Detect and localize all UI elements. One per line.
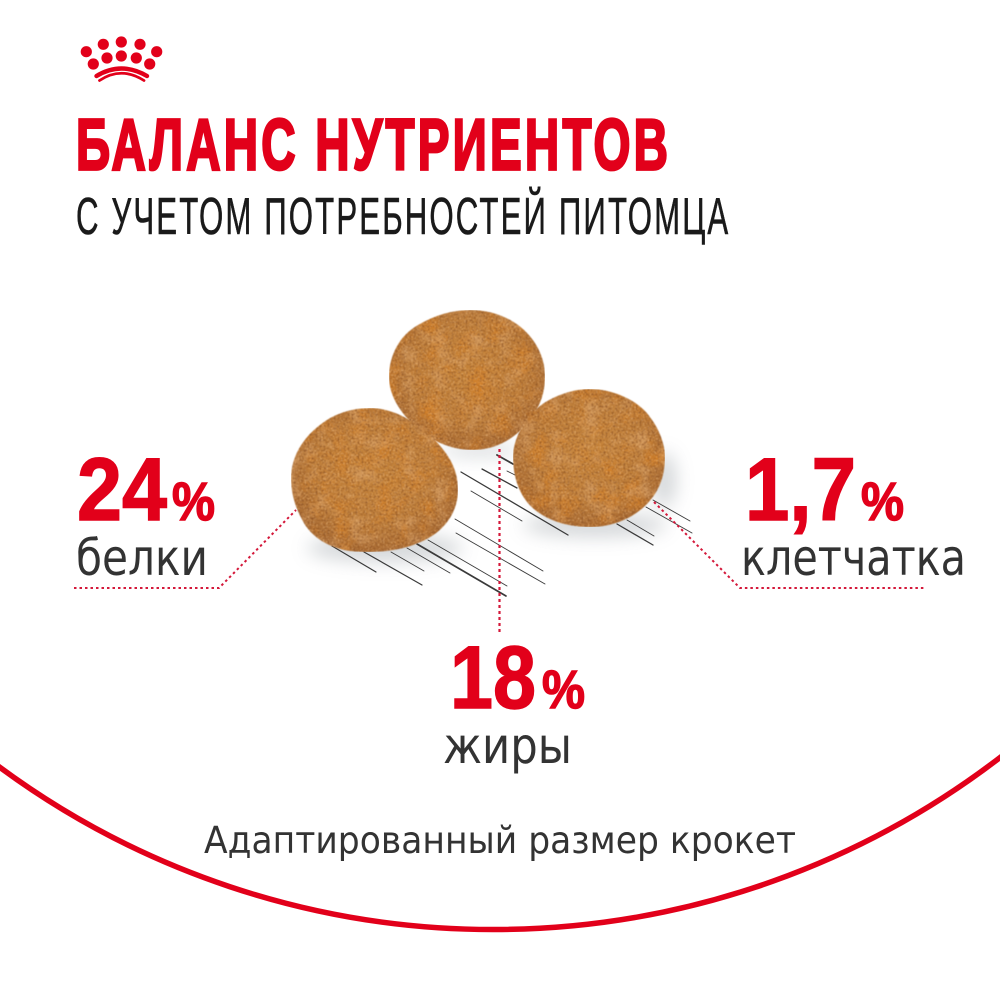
dotted leader: белки: [74, 510, 296, 588]
icon: Royal Canin crown logo: [81, 36, 162, 80]
stat: 18% жиры: жиры: [443, 717, 572, 775]
dotted leader: жиры: [498, 449, 501, 632]
kibble: right: [513, 389, 665, 527]
stat: 18% жиры: %: [542, 660, 585, 720]
subtitle: С УЧЕТОМ ПОТРЕБНОСТЕЙ ПИТОМЦА: [76, 187, 728, 246]
stat: 1,7% клетчатка: [741, 439, 966, 587]
dotted leader: клетчатка: [654, 502, 926, 588]
stat: 24% белки: 24: [77, 439, 167, 539]
kibble: left: [291, 408, 458, 552]
stat: 18% жиры: 18: [450, 627, 536, 727]
kibble shadows: [307, 444, 676, 562]
red arc: [0, 756, 1000, 930]
stat: 24% белки: [76, 439, 215, 587]
caption: Адаптированный размер крокет: [204, 818, 796, 862]
hatch lines under the kibbles: [332, 455, 692, 596]
kibble: top: [389, 310, 545, 450]
stat: 1,7% клетчатка: 1,7: [745, 439, 856, 539]
stat: 18% жиры: [443, 627, 585, 775]
stat: 24% белки: %: [172, 472, 215, 532]
stat: 24% белки: белки: [76, 529, 208, 587]
title: БАЛАНС НУТРИЕНТОВ: [76, 105, 668, 185]
stat: 1,7% клетчатка: %: [861, 472, 904, 532]
